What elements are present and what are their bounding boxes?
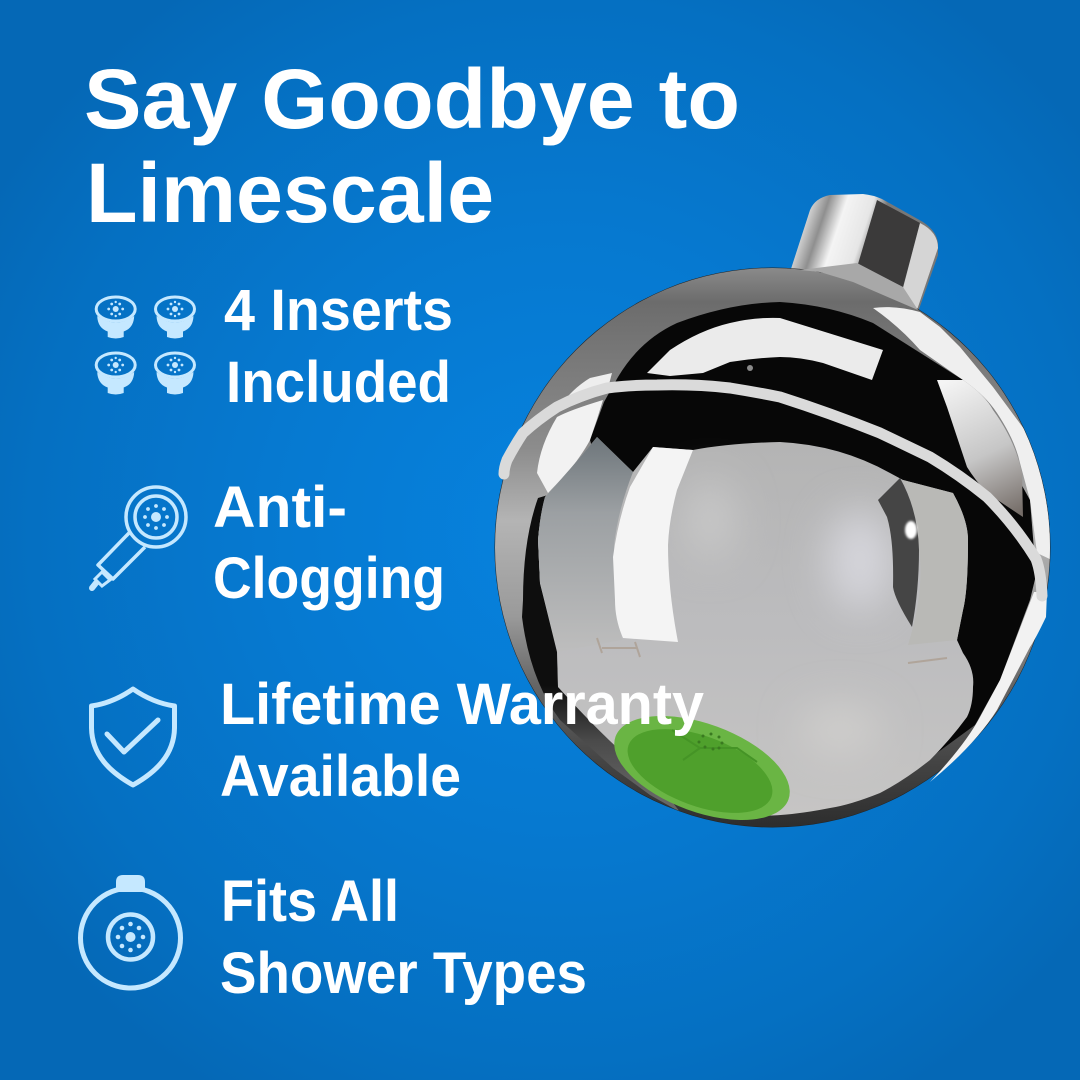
icon: hand shower: [92, 487, 186, 588]
wall bracket marks: [597, 638, 947, 663]
icon: shield with check: [92, 689, 174, 785]
left black strip: [522, 495, 680, 812]
shower head stem: [790, 194, 938, 312]
black interior reflection: [590, 302, 1036, 780]
feature: fits all shower types: [80, 869, 587, 1006]
dark crescent reflection: [878, 478, 919, 627]
label: lifetime warranty available: Available: [220, 744, 461, 809]
icon: round shower head: [80, 875, 180, 988]
upper-right white rim: [873, 307, 1052, 560]
label: anti-clogging: [213, 475, 445, 611]
lower-right white rim: [930, 592, 1047, 782]
vertical window reflection: [613, 447, 693, 642]
feature: 4 inserts included: [96, 278, 453, 415]
label: 4 inserts included: Included: [226, 350, 451, 415]
soft highlights: [828, 510, 892, 610]
title: Say Goodbye to: [84, 52, 740, 146]
label: anti-clogging: Clogging: [213, 546, 445, 611]
left room lobe: [538, 437, 633, 652]
band ring: [504, 385, 1042, 596]
label: lifetime warranty available: [220, 672, 704, 809]
ribbed reflection: [937, 380, 1023, 517]
right room lobe: [903, 480, 968, 645]
label: anti-clogging: Anti-: [213, 475, 347, 540]
label: fits all shower types: Shower Types: [220, 941, 587, 1006]
icon: insert top left: [96, 297, 135, 338]
icon: four inserts: [96, 297, 194, 394]
icon: insert bottom right: [156, 353, 194, 394]
left white reflections: [568, 373, 612, 405]
green limescale insert: [600, 695, 804, 841]
top window reflection: [647, 318, 883, 380]
feature: anti-clogging: [92, 475, 445, 611]
feature: lifetime warranty: [92, 672, 704, 809]
chrome sphere body: [490, 260, 1060, 835]
product: chrome spherical shower head: [490, 194, 1060, 841]
icon: insert bottom left: [96, 353, 135, 394]
label: 4 inserts included: [224, 278, 453, 415]
title: [84, 52, 740, 240]
room reflection: [538, 437, 973, 816]
stem collar: [800, 263, 918, 310]
label: fits all shower types: Fits All: [221, 869, 399, 934]
title: Limescale: [86, 146, 494, 240]
label: 4 inserts included: 4 Inserts: [224, 278, 453, 343]
icon: insert top right: [156, 297, 194, 338]
label: lifetime warranty available: Lifetime Warranty: [220, 672, 704, 737]
label: fits all shower types: [220, 869, 587, 1006]
